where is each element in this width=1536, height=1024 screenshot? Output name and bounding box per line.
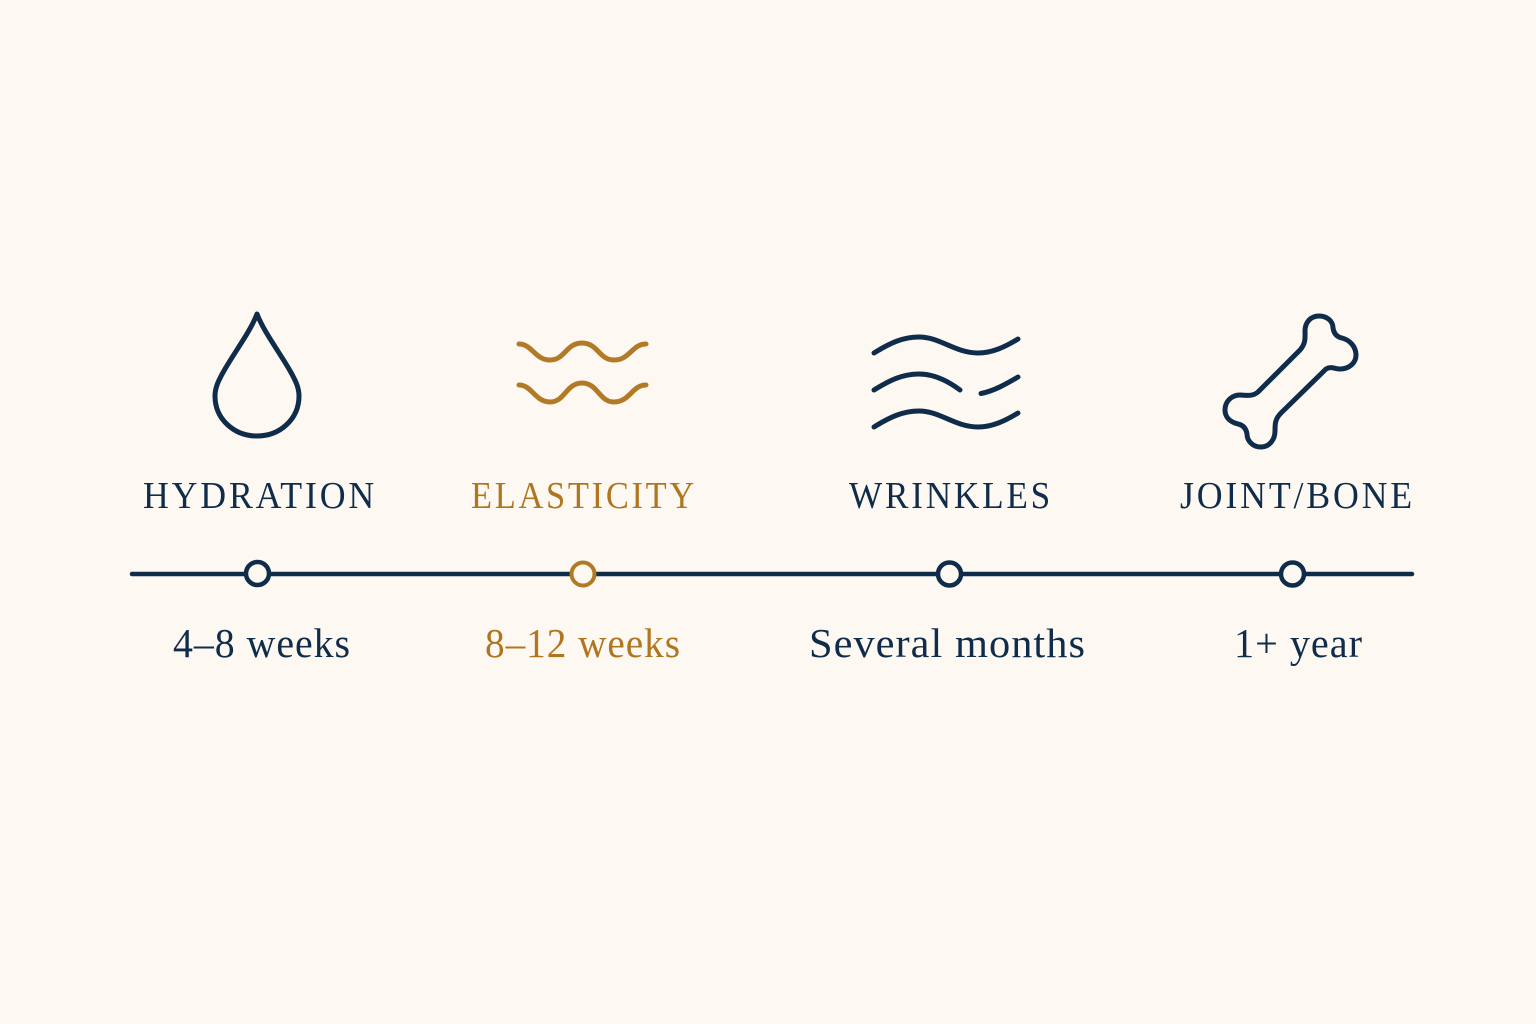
- icon: wrinkle lines: [874, 337, 1018, 427]
- marker: wrinkles: [938, 562, 961, 586]
- label: wrinkles: WRINKLES: [849, 475, 1053, 517]
- marker: joint/bone: [1281, 562, 1304, 586]
- duration: elasticity: 8–12 weeks: [485, 620, 681, 666]
- label: elasticity: ELASTICITY: [471, 475, 697, 517]
- duration: joint/bone: 1+ year: [1234, 620, 1363, 666]
- label: joint/bone: JOINT/BONE: [1180, 475, 1415, 517]
- icon: bone: [1225, 316, 1356, 447]
- duration: wrinkles: Several months: [809, 620, 1086, 666]
- label: hydration: HYDRATION: [143, 475, 377, 517]
- icon: elasticity waves: [519, 343, 646, 402]
- timeline with markers: [132, 562, 1412, 586]
- duration: hydration: 4–8 weeks: [173, 620, 351, 666]
- marker: hydration: [246, 562, 269, 585]
- icon: water drop: [215, 314, 299, 436]
- marker: elasticity: [572, 562, 594, 586]
